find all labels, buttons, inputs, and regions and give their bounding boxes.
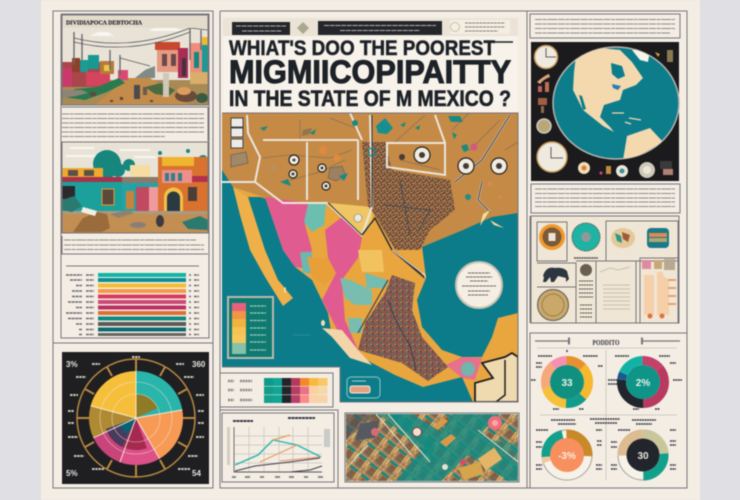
panel: colour palette — [220, 373, 333, 407]
title: WHIAT'S DOO THE POOREST — [229, 37, 495, 60]
water: Hudson Bay — [611, 63, 625, 79]
donut 1: 33 — [561, 378, 573, 389]
corner territory — [475, 353, 518, 402]
text box: top — [530, 14, 680, 38]
header black box right — [318, 21, 442, 35]
icon: orange coin — [539, 224, 565, 250]
text block: intro paragraph — [62, 114, 204, 136]
header emblem — [297, 22, 309, 34]
panel: aerial tile map — [345, 413, 519, 482]
land: north territory — [222, 113, 518, 278]
region: seafoam north — [304, 204, 326, 232]
map small inset — [347, 377, 380, 398]
donut 4 — [611, 420, 676, 480]
donut 3: -3% — [558, 451, 576, 462]
pie: orange sector — [136, 410, 183, 459]
icon: old coin — [538, 290, 568, 320]
heading: PODDITO — [592, 339, 620, 347]
south mosaic — [358, 275, 448, 381]
pie: yellow sector — [91, 371, 136, 418]
pie: olive sector — [89, 406, 136, 438]
header strip — [223, 18, 518, 36]
region: pink north-west — [265, 197, 312, 268]
series: dark — [235, 458, 322, 472]
text box: middle — [531, 184, 680, 213]
donut 2: 2% — [636, 378, 650, 389]
icon: teal disc — [572, 223, 600, 251]
donut 3 — [536, 419, 620, 480]
region: pink central — [322, 217, 362, 350]
pie: inner dark teal — [119, 418, 136, 434]
text block: second paragraph — [64, 240, 204, 250]
panel: globe on black — [531, 42, 679, 181]
donut 1 — [531, 350, 603, 409]
corner labels: 5% — [66, 469, 78, 478]
donut 2 — [608, 356, 682, 409]
icon: Mexico emblem — [611, 228, 635, 248]
icon: small medal — [580, 264, 592, 276]
land: Baja California — [233, 187, 293, 306]
map icons — [231, 116, 504, 228]
corner labels: 3% — [66, 360, 78, 369]
title: MIGMIICOPIPAITTY — [229, 54, 511, 90]
land: Mexico mainland — [233, 187, 518, 402]
map notch — [222, 367, 340, 403]
city mosaic — [362, 142, 455, 250]
series: orange — [260, 435, 297, 462]
land: South America — [623, 128, 663, 162]
title: IN THE STATE OF M MEXICO ? — [229, 86, 511, 111]
icon: animal — [543, 268, 569, 282]
region: orange west — [306, 256, 314, 274]
sea — [221, 170, 518, 402]
panel: center column frame — [220, 11, 527, 488]
pie: inner crimson — [122, 418, 147, 450]
map legend — [228, 297, 273, 358]
land: Greenland — [632, 50, 650, 62]
icon: stamps — [642, 260, 651, 269]
header note — [450, 20, 510, 34]
panel: artifact collage — [531, 216, 679, 323]
illustration: town square — [62, 142, 208, 233]
icon: striped badge — [647, 228, 669, 248]
series: teal — [235, 440, 321, 465]
chart: horizontal bars — [66, 273, 199, 336]
clocks — [534, 46, 567, 172]
pie: magenta sector — [93, 418, 136, 462]
icon: orange poster — [644, 272, 669, 315]
region: seafoam south — [348, 318, 362, 333]
donut 4: 30 — [637, 451, 649, 462]
region: seafoam upper — [365, 273, 388, 288]
corner labels: 360 — [192, 360, 206, 369]
map seal — [456, 262, 502, 308]
panel: donut charts — [530, 333, 687, 488]
region: Yucatan base — [446, 357, 482, 380]
map markers — [289, 147, 507, 190]
region: pale orange — [358, 250, 384, 272]
map of Mexico — [222, 112, 518, 403]
title — [229, 37, 511, 111]
pie: pink sector — [120, 418, 160, 465]
corner labels — [66, 360, 206, 478]
illustration: poor street scene — [62, 15, 208, 105]
pie: inner purple — [106, 418, 136, 447]
region: Pacific coast strip — [322, 328, 372, 365]
panel: radial pie chart — [62, 352, 209, 484]
panel: line chart — [220, 410, 338, 488]
panel: right column frame — [527, 11, 687, 488]
header black box left — [232, 22, 290, 35]
image caption: DIVIDIAPOCA DEBTOCHA — [66, 20, 143, 26]
region: seafoam central — [340, 278, 372, 305]
pie: inner olive — [136, 394, 158, 418]
title background — [223, 36, 518, 113]
region: light north — [330, 203, 372, 235]
region: seafoam west — [300, 252, 313, 273]
map frame — [222, 113, 518, 402]
series: orange low — [280, 457, 320, 461]
pie: teal sector — [136, 371, 182, 418]
small icons — [537, 74, 550, 84]
roads — [262, 112, 518, 180]
corner labels: 54 — [192, 469, 201, 478]
land: North America — [573, 48, 643, 132]
panel: left column — [53, 11, 213, 488]
borders — [222, 113, 510, 235]
